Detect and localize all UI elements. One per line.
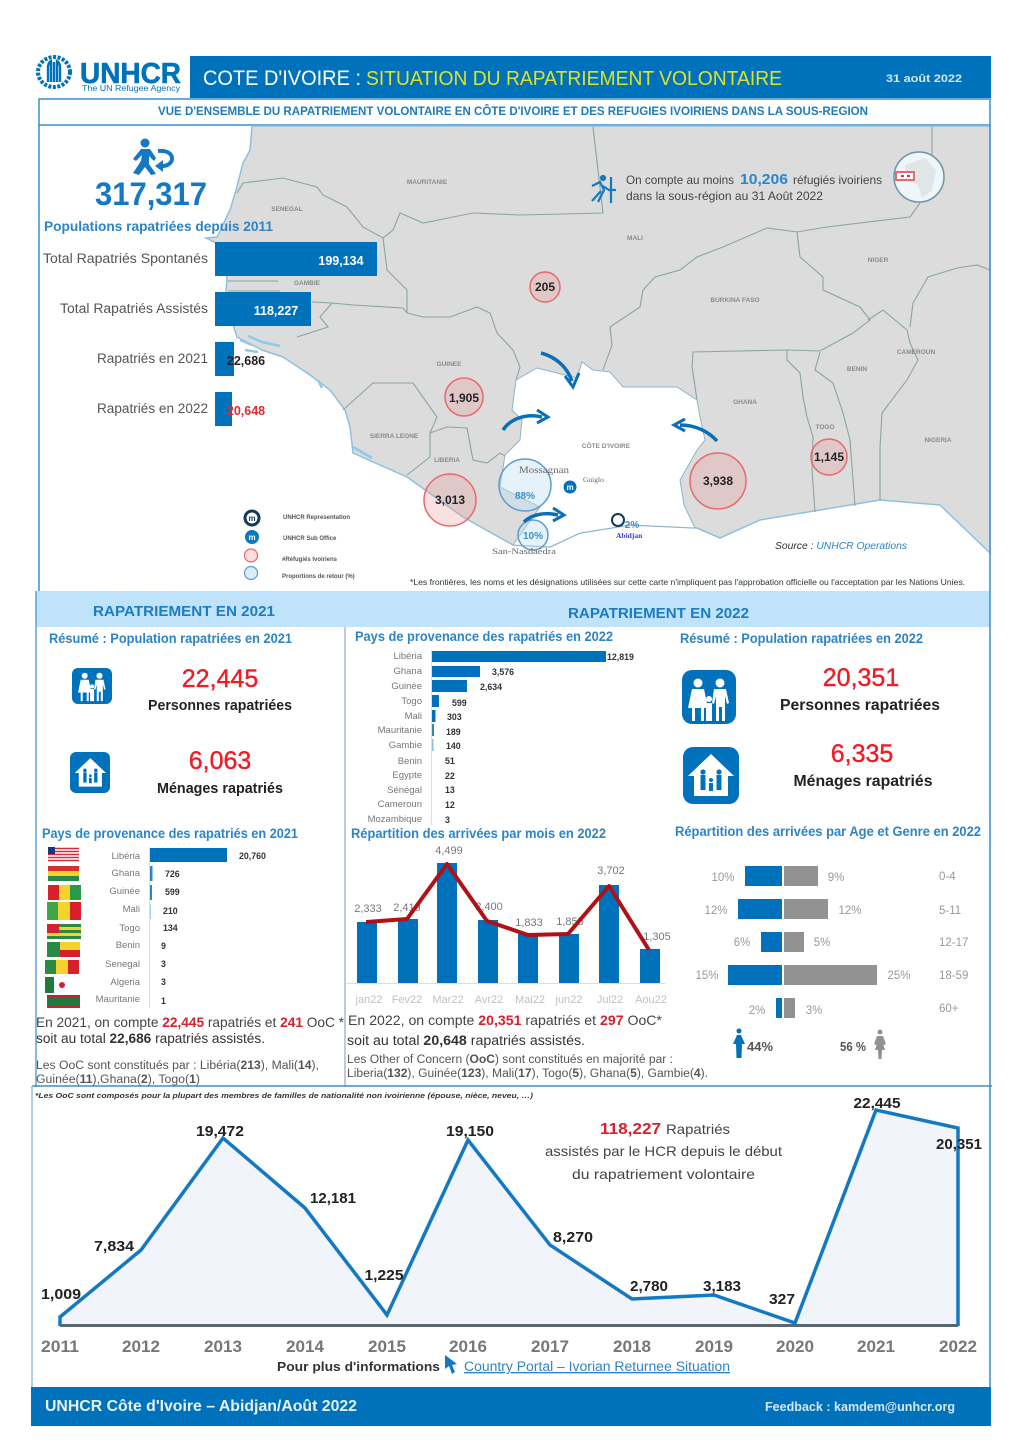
place names: Abidjan bbox=[616, 531, 643, 540]
month labels: jan22 bbox=[355, 994, 382, 1006]
country labels: Gambie bbox=[389, 740, 422, 751]
value labels: 19,150 bbox=[446, 1123, 494, 1140]
year labels: 2015 bbox=[368, 1337, 406, 1356]
value labels bbox=[354, 845, 671, 943]
bar chart: totals: 20,648 bbox=[227, 404, 265, 418]
section band bbox=[36, 591, 990, 627]
values: 134 bbox=[163, 923, 178, 933]
panel: summary 2021 bbox=[49, 631, 292, 797]
map legend: Proportions de retour (%) bbox=[282, 574, 355, 580]
total returnees: 317,317 bbox=[95, 176, 207, 212]
map panel bbox=[206, 126, 990, 587]
country labels: GAMBIE bbox=[294, 280, 321, 287]
country labels: Senegal bbox=[105, 959, 140, 970]
refugee circles bbox=[424, 272, 847, 526]
heading 2021: RAPATRIEMENT EN 2021 bbox=[93, 603, 275, 620]
country labels: Mauritanie bbox=[378, 725, 422, 736]
country labels: NIGERIA bbox=[924, 437, 952, 444]
values: 3,576 bbox=[492, 667, 514, 677]
year labels: 2018 bbox=[613, 1337, 651, 1356]
value labels: 1,833 bbox=[515, 917, 543, 929]
values: 2,634 bbox=[480, 682, 502, 692]
households caption: Ménages rapatriés bbox=[157, 781, 283, 797]
title: COTE D'IVOIRE : bbox=[203, 67, 361, 90]
year labels: 2017 bbox=[531, 1337, 569, 1356]
logo: UNHCR bbox=[38, 57, 181, 93]
place names: Mossagnan bbox=[519, 466, 569, 476]
source: Source : UNHCR Operations bbox=[775, 540, 908, 552]
value labels: 3,183 bbox=[703, 1278, 741, 1295]
country labels: TOGO bbox=[815, 424, 835, 431]
country labels: Ghana bbox=[111, 868, 141, 879]
year labels: 2016 bbox=[449, 1337, 487, 1356]
refugee counts: 3,938 bbox=[703, 474, 733, 488]
panel: origin countries 2021 bbox=[42, 826, 298, 1008]
female bars bbox=[784, 866, 877, 1018]
refugee counts bbox=[435, 280, 844, 507]
bar chart: totals: 199,134 bbox=[318, 254, 364, 268]
country labels: BENIN bbox=[847, 366, 867, 373]
country labels: Egypte bbox=[392, 770, 422, 781]
value labels: 1,009 bbox=[41, 1286, 81, 1303]
map legend: UNHCR Representation bbox=[283, 515, 350, 521]
persons figure: 22,445 bbox=[182, 665, 258, 693]
value labels: 22,445 bbox=[854, 1095, 900, 1112]
year labels: 2011 bbox=[41, 1337, 79, 1356]
country labels: Libéria bbox=[393, 651, 423, 662]
percent labels: 25% bbox=[887, 970, 911, 982]
values: 1 bbox=[161, 996, 166, 1006]
values: 51 bbox=[445, 756, 455, 766]
age labels: 18-59 bbox=[939, 970, 968, 982]
panel: origin countries 2022 bbox=[355, 629, 634, 825]
year labels: 2014 bbox=[286, 1337, 325, 1356]
tagline: The UN Refugee Agency bbox=[82, 84, 180, 93]
country labels: SENEGAL bbox=[271, 206, 303, 213]
year labels bbox=[41, 1337, 977, 1356]
text block: 2022 summary: Liberia(132), Guinée(123), Mali(17), Togo(5), Ghana(5), Gambie(4). bbox=[347, 1068, 708, 1080]
date: 31 août 2022 bbox=[886, 73, 962, 85]
footer left text: UNHCR Côte d'Ivoire – Abidjan/Août 2022 bbox=[45, 1398, 357, 1415]
title highlight: SITUATION DU RAPATRIEMENT VOLONTAIRE bbox=[366, 68, 782, 90]
value labels bbox=[41, 1095, 982, 1308]
male share: 44% bbox=[747, 1040, 773, 1054]
bar chart: totals: Total Rapatriés Spontanés bbox=[43, 251, 208, 266]
map land bbox=[206, 126, 990, 553]
age labels bbox=[939, 871, 968, 1015]
country labels: Mali bbox=[123, 904, 140, 915]
value labels: 1,855 bbox=[556, 916, 584, 928]
values: 726 bbox=[165, 869, 180, 879]
panel: summary 2021: Résumé : Population rapatriées en 2021 bbox=[49, 631, 292, 646]
more information link: Pour plus d'informations bbox=[277, 1359, 440, 1374]
refugee counts: 205 bbox=[535, 280, 555, 294]
persons figure: 20,351 bbox=[823, 664, 899, 692]
value labels: 2,400 bbox=[475, 901, 503, 913]
country labels: LIBERIA bbox=[434, 457, 460, 464]
panel: origin countries 2022: Pays de provenance des rapatriés en 2022 bbox=[355, 629, 613, 644]
icon: household bbox=[70, 752, 110, 793]
bars bbox=[431, 650, 606, 825]
value labels: 2,780 bbox=[630, 1278, 668, 1295]
return percentages: 10% bbox=[523, 531, 543, 542]
heading 2022: RAPATRIEMENT EN 2022 bbox=[568, 605, 749, 622]
month labels: Mar22 bbox=[432, 994, 464, 1006]
country labels: MALI bbox=[627, 235, 643, 242]
value labels: 1,305 bbox=[643, 931, 671, 943]
country labels: SIERRA LEONE bbox=[370, 433, 419, 440]
country labels: BURKINA FASO bbox=[710, 297, 760, 304]
value labels: 2,419 bbox=[393, 902, 421, 914]
refugee count note: dans la sous-région au 31 Août 2022 bbox=[626, 189, 823, 203]
text block: 2021 summary: soit au total 22,686 rapatriés assistés. bbox=[36, 1031, 265, 1046]
value labels: 8,270 bbox=[553, 1229, 593, 1246]
return percentages: 2% bbox=[625, 520, 639, 531]
values: 3 bbox=[161, 959, 166, 969]
panel: monthly arrivals 2022: Répartition des arrivées par mois en 2022 bbox=[351, 826, 606, 841]
map legend: m bbox=[248, 533, 256, 542]
year labels: 2020 bbox=[776, 1337, 814, 1356]
map legend: UNHCR Sub Office bbox=[283, 536, 337, 542]
month labels: Mai22 bbox=[515, 994, 545, 1006]
bar chart: totals: Total Rapatriés Assistés bbox=[60, 301, 208, 316]
values: 12,819 bbox=[607, 652, 634, 662]
value labels: 327 bbox=[769, 1291, 795, 1308]
callout: assisted total: du rapatriement volontaire bbox=[572, 1166, 755, 1182]
values: 13 bbox=[445, 785, 455, 795]
map borders bbox=[228, 127, 990, 512]
map legend bbox=[244, 511, 355, 580]
country labels: Libéria bbox=[111, 851, 141, 862]
country: Cote d'Ivoire bbox=[500, 362, 705, 547]
more information link bbox=[277, 1355, 730, 1374]
households caption: Ménages rapatriés bbox=[794, 773, 932, 790]
month labels: Avr22 bbox=[475, 994, 503, 1006]
icon: family bbox=[72, 668, 112, 704]
text block: 2022 summary: Les Other of Concern ( OoC) sont constitués en majorité par : bbox=[347, 1054, 673, 1066]
icon: female bbox=[874, 1030, 886, 1059]
male bars bbox=[728, 866, 782, 1018]
values: 599 bbox=[165, 887, 180, 897]
text block: 2021 summary bbox=[36, 1014, 345, 1086]
year labels: 2012 bbox=[122, 1337, 160, 1356]
persons caption: Personnes rapatriées bbox=[780, 697, 940, 714]
map legend: m bbox=[248, 514, 256, 523]
OoC footnote: *Les OoC sont composés pour la plupart des membres de familles de nationalité non ivoirienne (épouse, nièce, neveu, …) bbox=[35, 1091, 534, 1100]
year labels: 2019 bbox=[695, 1337, 733, 1356]
value labels: 1,225 bbox=[364, 1267, 404, 1284]
place names: Guiglo bbox=[583, 475, 604, 484]
callout: assisted total: Rapatriés bbox=[666, 1121, 730, 1137]
values: 3 bbox=[445, 815, 450, 825]
country labels: Togo bbox=[119, 923, 140, 934]
percent labels: 9% bbox=[828, 872, 844, 884]
values bbox=[445, 652, 634, 825]
country labels: Sénégal bbox=[387, 785, 422, 796]
values: 9 bbox=[161, 941, 166, 951]
panel: summary 2022: Résumé : Population rapatriées en 2022 bbox=[680, 631, 923, 646]
country labels: CÔTE D'IVOIRE bbox=[582, 441, 631, 450]
panel: monthly arrivals 2022 bbox=[347, 826, 671, 1006]
percent labels: 15% bbox=[695, 970, 719, 982]
bars bbox=[149, 847, 227, 1008]
bar chart: totals: 118,227 bbox=[254, 304, 298, 318]
icon: cursor bbox=[445, 1355, 457, 1374]
refugee count note bbox=[626, 171, 882, 203]
country labels bbox=[96, 851, 141, 1005]
values: 210 bbox=[163, 906, 178, 916]
representation icon bbox=[612, 514, 624, 526]
percent labels bbox=[695, 872, 911, 1017]
age labels: 0-4 bbox=[939, 871, 956, 883]
text block: 2022 summary bbox=[347, 1012, 708, 1080]
percent labels: 2% bbox=[749, 1005, 765, 1017]
percent labels: 12% bbox=[838, 905, 862, 917]
percent labels: 5% bbox=[814, 937, 830, 949]
bar chart: totals: Rapatriés en 2022 bbox=[97, 401, 208, 416]
values: 20,760 bbox=[239, 851, 266, 861]
subtitle bar: VUE D'ENSEMBLE DU RAPATRIEMENT VOLONTAIRE EN CÔTE D'IVOIRE ET DES REFUGIES IVOIRIENS DANS LA SOUS-REGION bbox=[158, 105, 868, 118]
country labels: Mauritanie bbox=[96, 994, 140, 1005]
bar chart: totals: Rapatriés en 2021 bbox=[97, 351, 208, 366]
values: 12 bbox=[445, 800, 455, 810]
country labels: NIGER bbox=[868, 257, 889, 264]
households figure: 6,063 bbox=[189, 747, 251, 775]
icon: family bbox=[682, 670, 736, 724]
axis bbox=[60, 1324, 958, 1327]
text block: 2022 summary: soit au total 20,648 rapatriés assistés. bbox=[347, 1033, 585, 1048]
refugee count note: On compte au moins bbox=[626, 173, 734, 187]
country labels: Mali bbox=[405, 711, 422, 722]
age labels: 12-17 bbox=[939, 937, 968, 949]
inset globe bbox=[894, 152, 944, 202]
icon: UNHCR emblem bbox=[38, 57, 70, 87]
return percentages: 88% bbox=[515, 491, 535, 502]
country labels: GHANA bbox=[733, 399, 757, 406]
area bbox=[60, 1110, 958, 1326]
value labels: 7,834 bbox=[94, 1238, 135, 1255]
month labels bbox=[355, 994, 667, 1006]
icon: male bbox=[733, 1028, 745, 1058]
panel: age and gender 2022 bbox=[675, 824, 981, 1059]
text block: 2021 summary: Les OoC sont constitués par : Libéria( 213), Mali(14), bbox=[36, 1060, 319, 1072]
subtitle bar bbox=[39, 99, 990, 125]
return proportion circles bbox=[499, 459, 551, 550]
values: 22 bbox=[445, 771, 455, 781]
month labels: Aou22 bbox=[635, 994, 667, 1006]
left summary overlay bbox=[43, 138, 377, 426]
percent labels: 12% bbox=[704, 905, 728, 917]
percent labels: 6% bbox=[734, 937, 750, 949]
country labels bbox=[368, 651, 423, 825]
refugee counts: 3,013 bbox=[435, 493, 465, 507]
female share: 56 % bbox=[840, 1040, 866, 1054]
wordmark: UNHCR bbox=[80, 58, 181, 90]
refugee counts: 1,145 bbox=[814, 450, 844, 464]
callout: assisted total bbox=[545, 1121, 782, 1182]
text block: 2022 summary: En 2022, on compte 20,351 rapatriés et 297 OoC* bbox=[348, 1012, 663, 1028]
age labels: 5-11 bbox=[939, 905, 961, 917]
refugee icon bbox=[592, 176, 616, 203]
age labels: 60+ bbox=[939, 1003, 959, 1015]
persons caption: Personnes rapatriées bbox=[148, 698, 292, 714]
place names bbox=[492, 466, 643, 556]
country labels: Benin bbox=[398, 756, 422, 767]
value labels: 3,702 bbox=[597, 865, 625, 877]
sub office icon: m bbox=[566, 483, 574, 492]
year labels: 2013 bbox=[204, 1337, 242, 1356]
icon: returning person bbox=[133, 138, 172, 175]
year labels: 2022 bbox=[939, 1337, 977, 1356]
value labels: 2,333 bbox=[354, 903, 382, 915]
country labels: Ghana bbox=[393, 666, 423, 677]
refugee count note: 10,206 bbox=[740, 171, 788, 188]
values: 303 bbox=[447, 712, 462, 722]
values: 3 bbox=[161, 977, 166, 987]
year labels: 2021 bbox=[857, 1337, 895, 1356]
refugee counts: 1,905 bbox=[449, 391, 479, 405]
country labels: Guinée bbox=[391, 681, 422, 692]
country labels: Mozambique bbox=[368, 814, 422, 825]
country labels: GUINEE bbox=[437, 361, 462, 368]
value labels: 4,499 bbox=[435, 845, 463, 857]
callout: assisted total: 118,227 bbox=[600, 1121, 661, 1138]
flags bbox=[45, 847, 81, 1008]
flow arrows bbox=[503, 353, 717, 522]
map legend: #Réfugiés Ivoiriens bbox=[282, 557, 338, 563]
axis bbox=[347, 983, 665, 984]
country labels: CAMEROUN bbox=[897, 349, 935, 356]
sub office icon bbox=[564, 480, 576, 494]
return percentages bbox=[515, 491, 639, 542]
percent labels: 10% bbox=[711, 872, 735, 884]
percent labels: 3% bbox=[806, 1005, 822, 1017]
footer bbox=[31, 1387, 991, 1426]
panel: age and gender 2022: Répartition des arrivées par Age et Genre en 2022 bbox=[675, 824, 981, 839]
refugee count note: réfugiés ivoiriens bbox=[793, 173, 882, 187]
country labels: MAURITANIE bbox=[407, 179, 448, 186]
panel: summary 2022 bbox=[680, 631, 940, 804]
country labels: Algeria bbox=[110, 977, 141, 988]
value labels: 20,351 bbox=[936, 1136, 982, 1153]
country labels: Cameroun bbox=[378, 799, 422, 810]
households figure: 6,335 bbox=[831, 740, 893, 768]
values: 599 bbox=[452, 698, 467, 708]
line bbox=[60, 1110, 958, 1326]
icon: household bbox=[683, 747, 739, 804]
country labels: Togo bbox=[401, 696, 422, 707]
place names: San-Nasdaédra bbox=[492, 546, 556, 556]
header banner bbox=[190, 56, 991, 98]
month labels: Fev22 bbox=[392, 994, 422, 1006]
bar chart: totals bbox=[43, 242, 377, 426]
value labels: 12,181 bbox=[310, 1190, 356, 1207]
values: 140 bbox=[446, 741, 461, 751]
country labels: Benin bbox=[116, 940, 140, 951]
total caption: Populations rapatriées depuis 2011 bbox=[44, 218, 273, 234]
disclaimer: *Les frontières, les noms et les désignations utilisées sur cette carte n'impliquent pas l'approbation officielle ou l'acceptation par les Nations Unies. bbox=[410, 577, 965, 587]
bar chart bbox=[357, 863, 660, 983]
values: 189 bbox=[446, 727, 461, 737]
month labels: jun22 bbox=[555, 994, 582, 1006]
country labels bbox=[271, 179, 952, 464]
text block: 2021 summary: En 2021, on compte 22,445 rapatriés et 241 OoC * bbox=[36, 1014, 345, 1030]
footer contact: Feedback : kamdem@unhcr.org bbox=[765, 1399, 955, 1414]
text block: 2021 summary: Guinée(11),Ghana( 2), Togo(1) bbox=[36, 1074, 200, 1086]
callout: assisted total: assistés par le HCR depuis le début bbox=[545, 1143, 782, 1159]
values bbox=[161, 851, 266, 1006]
trend line bbox=[366, 864, 649, 950]
more information link: Country Portal – Ivorian Returnee Situation bbox=[464, 1359, 730, 1374]
country labels: Guinée bbox=[109, 886, 140, 897]
bar chart: totals: 22,686 bbox=[227, 354, 265, 368]
value labels: 19,472 bbox=[196, 1123, 244, 1140]
line chart: assisted returnees by year bbox=[41, 1095, 982, 1356]
month labels: Jul22 bbox=[597, 994, 623, 1006]
panel: origin countries 2021: Pays de provenance des rapatriés en 2021 bbox=[42, 826, 298, 841]
coastal islands bbox=[240, 336, 372, 458]
